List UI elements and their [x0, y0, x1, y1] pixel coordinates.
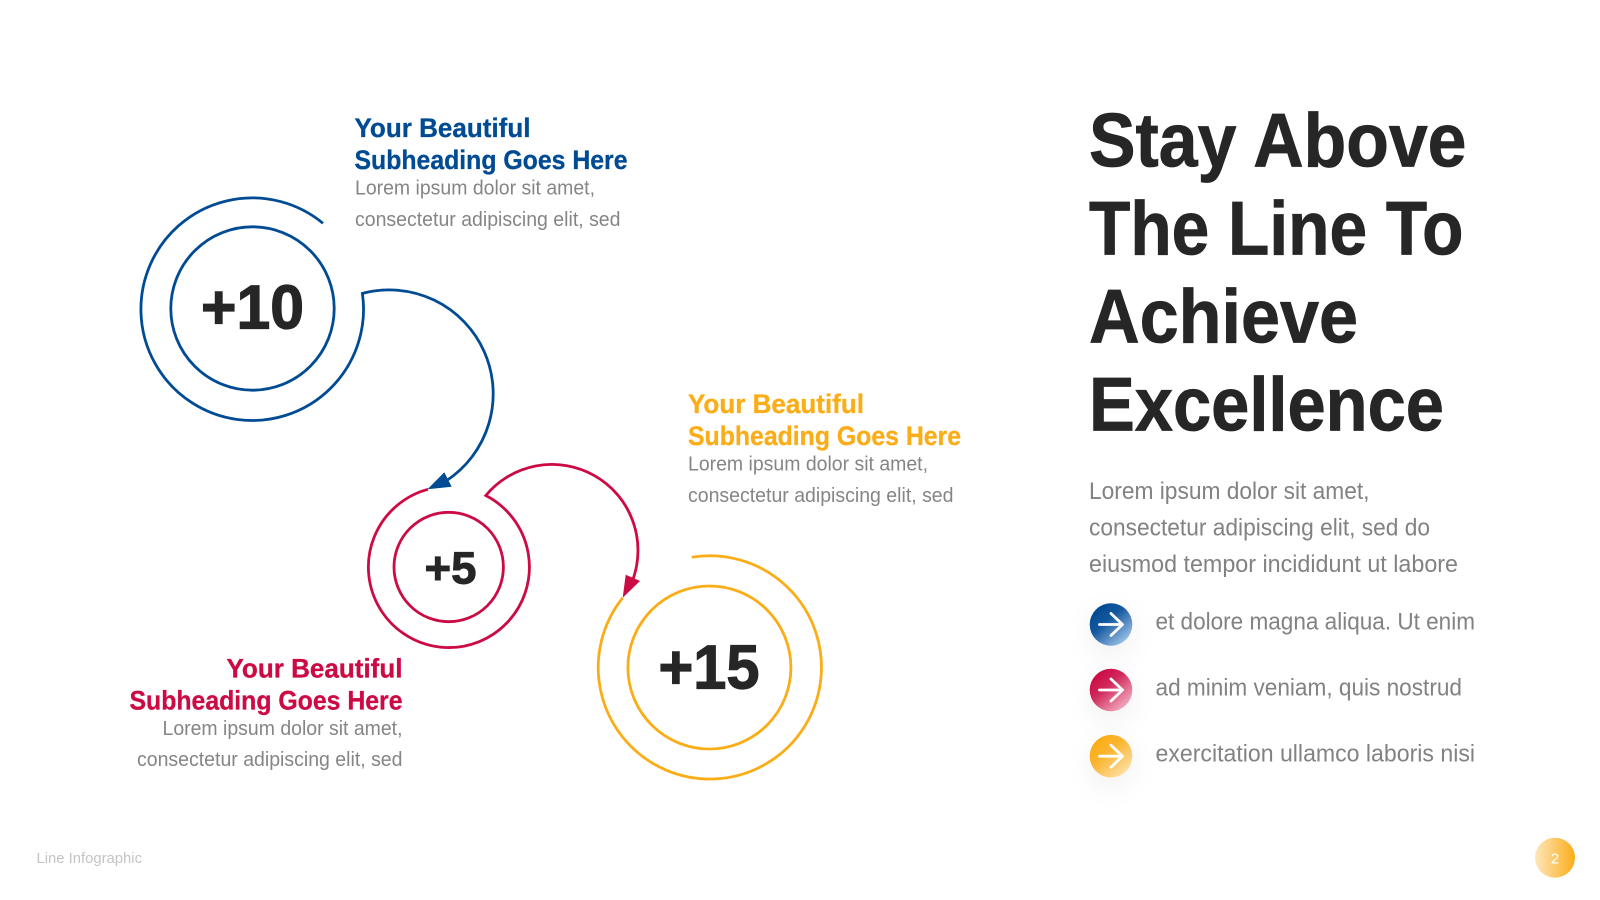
list item 1: [1090, 603, 1475, 646]
page number badge: 2: [1551, 850, 1559, 868]
footer label: Line Infographic: [36, 850, 142, 867]
text block: red subheading: Subheading Goes Here: [130, 686, 402, 716]
intro paragraph: eiusmod tempor incididunt ut labore: [1089, 551, 1458, 578]
intro paragraph: consectetur adipiscing elit, sed do: [1089, 514, 1430, 542]
text block: yellow subheading: Subheading Goes Here: [688, 421, 961, 451]
inner yellow ring: [628, 586, 791, 749]
intro paragraph: [1089, 478, 1458, 578]
page number badge: [1535, 838, 1575, 878]
text block: yellow subheading: consectetur adipiscing elit, sed: [688, 484, 954, 507]
title: The Line To: [1089, 186, 1464, 272]
text block: blue subheading: consectetur adipiscing elit, sed: [355, 208, 620, 231]
list item 3: exercitation ullamco laboris nisi: [1156, 740, 1475, 768]
title: Excellence: [1089, 362, 1444, 448]
text block: red subheading: consectetur adipiscing elit, sed: [137, 748, 402, 771]
red circle with +5: [394, 512, 503, 622]
text block: blue subheading: Lorem ipsum dolor sit amet,: [355, 176, 595, 200]
number +10: +10: [201, 274, 304, 342]
blue circle with +10: [171, 227, 334, 390]
yellow spiral arc: [598, 556, 821, 779]
intro paragraph: Lorem ipsum dolor sit amet,: [1089, 478, 1370, 505]
text block: yellow subheading: Your Beautiful: [688, 389, 864, 419]
text block: yellow subheading: Lorem ipsum dolor sit amet,: [688, 452, 928, 476]
text block: blue subheading: Subheading Goes Here: [354, 145, 628, 175]
title: Achieve: [1089, 274, 1358, 360]
list item 1: et dolore magna aliqua. Ut enim: [1156, 608, 1475, 636]
list item 2: ad minim veniam, quis nostrud: [1156, 674, 1462, 702]
text block: red subheading: Your Beautiful: [226, 654, 402, 684]
text block: blue subheading: Your Beautiful: [354, 113, 530, 143]
inner blue ring: [171, 227, 334, 390]
inner red ring: [394, 512, 503, 622]
title: Stay Above: [1089, 98, 1466, 184]
yellow circle with +15: [628, 586, 791, 749]
icon: blue arrow circle: [1090, 603, 1132, 646]
blue spiral arrow: [141, 198, 493, 489]
text block: blue subheading: [354, 113, 628, 231]
list item 2: [1090, 669, 1462, 711]
title: [1089, 98, 1466, 448]
list item 3: [1090, 735, 1475, 778]
icon: yellow arrow circle: [1090, 735, 1132, 778]
text block: red subheading: Lorem ipsum dolor sit amet,: [162, 717, 402, 740]
icon: red arrow circle: [1090, 669, 1132, 711]
text block: red subheading: [130, 654, 402, 771]
text block: yellow subheading: [688, 389, 961, 507]
number +5: +5: [424, 542, 476, 594]
red spiral arrow: [368, 464, 640, 648]
number +15: +15: [658, 634, 760, 702]
